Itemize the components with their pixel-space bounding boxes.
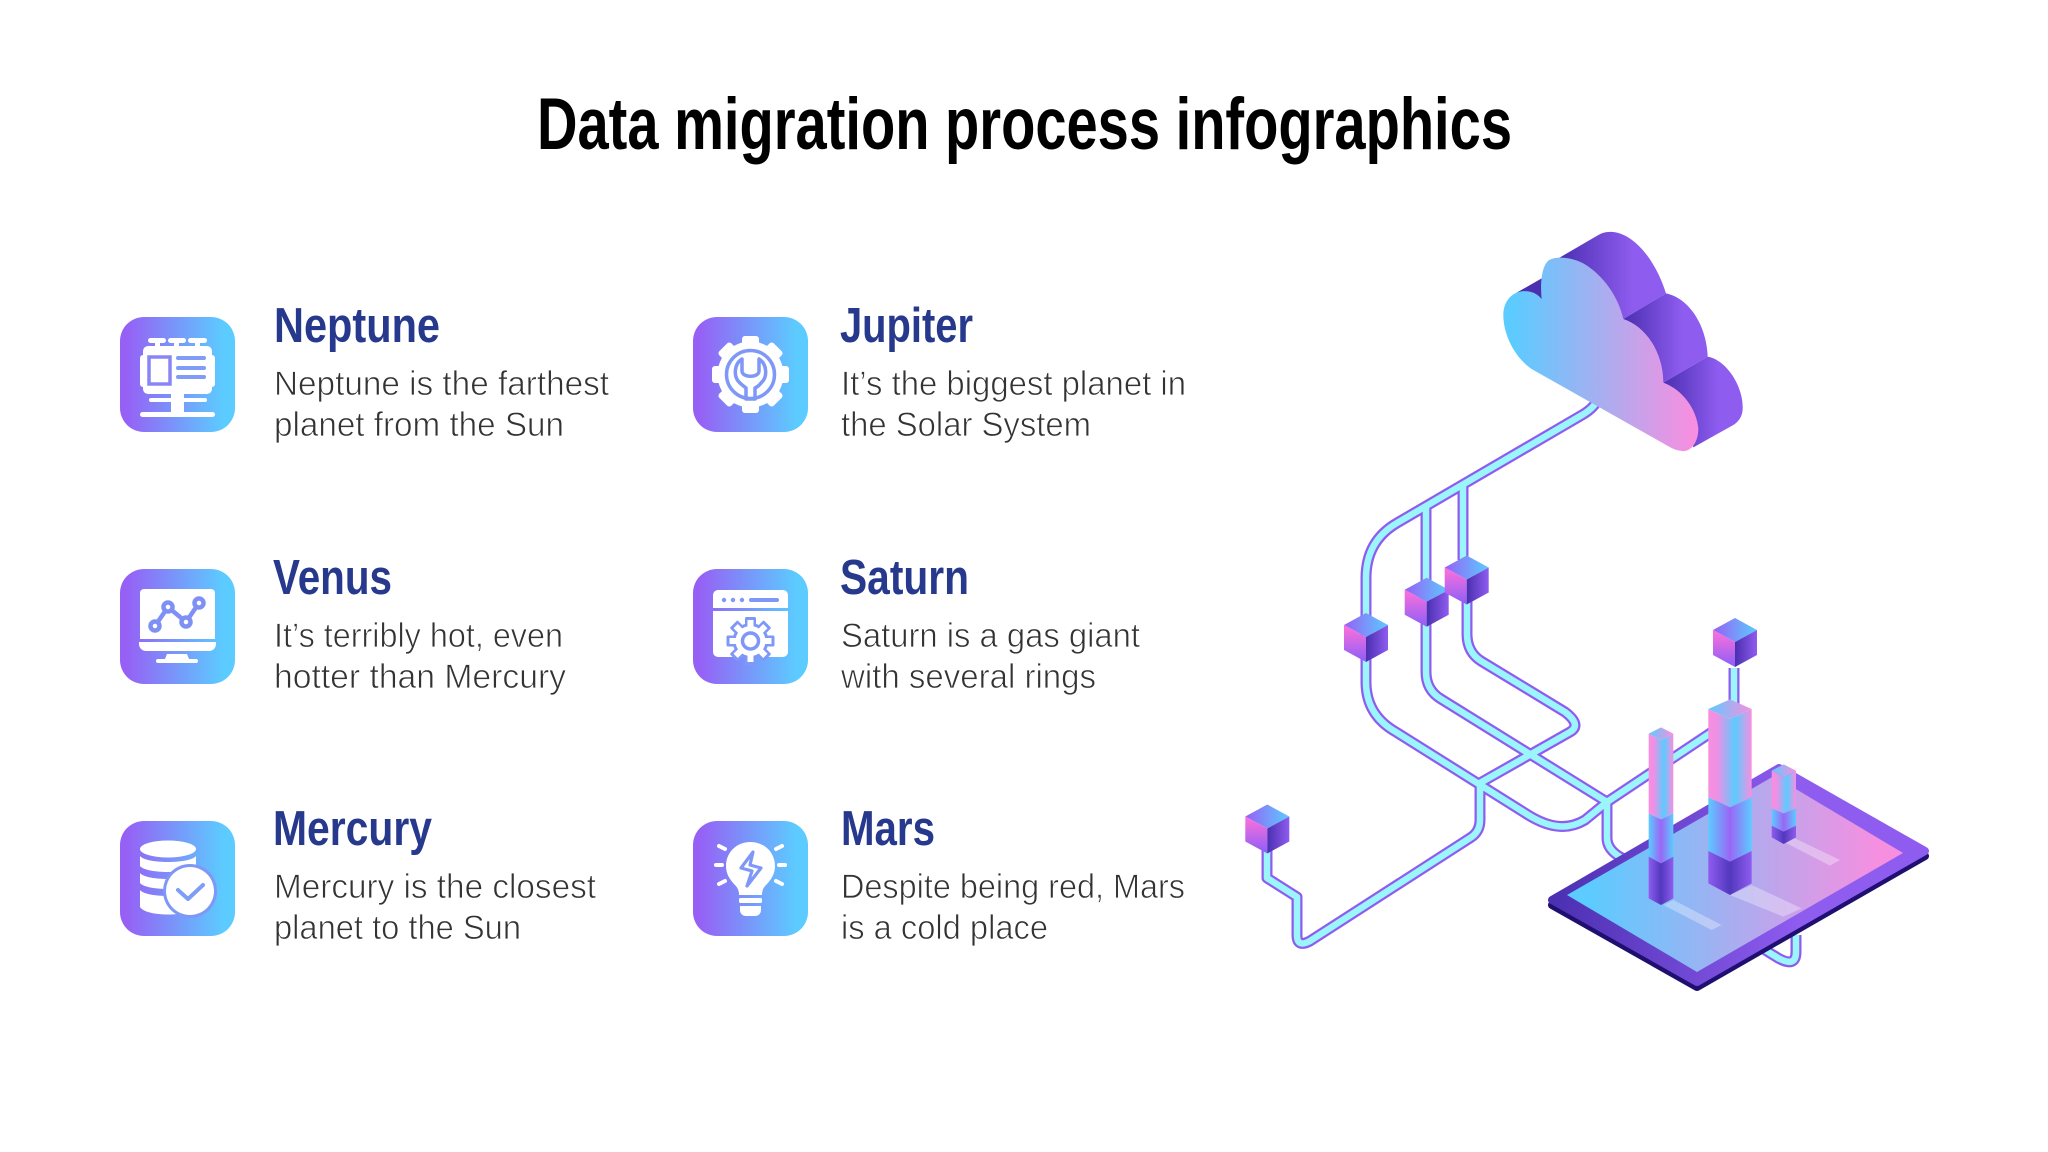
description bbox=[274, 617, 566, 696]
column 3 bbox=[1772, 764, 1796, 844]
heading: Saturn bbox=[840, 551, 969, 605]
description bbox=[841, 365, 1186, 444]
icon: gear wrench bbox=[693, 317, 808, 432]
cloud bbox=[1503, 232, 1743, 451]
item: Mercury bbox=[120, 802, 597, 947]
heading: Jupiter bbox=[840, 299, 973, 353]
item: Saturn bbox=[693, 551, 1141, 696]
description: with several rings bbox=[840, 658, 1096, 696]
description bbox=[274, 365, 610, 444]
description bbox=[841, 868, 1185, 947]
tablet bbox=[1552, 768, 1925, 987]
column 2 bbox=[1708, 699, 1752, 895]
description bbox=[840, 617, 1141, 696]
description: Neptune is the farthest bbox=[274, 365, 610, 403]
description bbox=[274, 868, 597, 947]
item: Jupiter bbox=[693, 299, 1186, 444]
description: planet to the Sun bbox=[274, 909, 521, 947]
chart columns bbox=[1649, 699, 1840, 930]
cube 3 bbox=[1445, 556, 1489, 604]
column 1 bbox=[1649, 727, 1673, 905]
cube 2 bbox=[1405, 578, 1449, 627]
description: hotter than Mercury bbox=[274, 658, 566, 696]
icon: browser gear bbox=[693, 569, 808, 684]
description: planet from the Sun bbox=[274, 406, 564, 444]
item: Mars bbox=[693, 802, 1185, 947]
description: Mercury is the closest bbox=[274, 868, 597, 906]
heading: Neptune bbox=[274, 299, 440, 353]
description: Saturn is a gas giant bbox=[841, 617, 1141, 655]
cube 1 bbox=[1344, 613, 1388, 662]
reflections bbox=[1663, 838, 1840, 930]
cube 5 bbox=[1713, 618, 1757, 667]
item: Venus bbox=[120, 551, 566, 696]
icon: database check bbox=[120, 821, 235, 936]
heading: Mercury bbox=[273, 802, 432, 856]
heading: Venus bbox=[273, 551, 392, 605]
description: It’s the biggest planet in bbox=[841, 365, 1186, 403]
description: It’s terribly hot, even bbox=[274, 617, 563, 655]
heading: Mars bbox=[841, 802, 935, 856]
cube 4 bbox=[1245, 804, 1289, 854]
description: Despite being red, Mars bbox=[841, 868, 1185, 906]
title: Data migration process infographics bbox=[537, 84, 1512, 165]
description: the Solar System bbox=[841, 406, 1091, 444]
illustration: isometric data migration bbox=[1245, 232, 1925, 987]
icon: billboard bbox=[120, 317, 235, 432]
data pipes bbox=[1267, 395, 1796, 962]
item: Neptune bbox=[120, 299, 610, 444]
description: is a cold place bbox=[841, 909, 1048, 947]
icon: light bulb bbox=[693, 821, 808, 936]
icon: monitor chart bbox=[120, 569, 235, 684]
